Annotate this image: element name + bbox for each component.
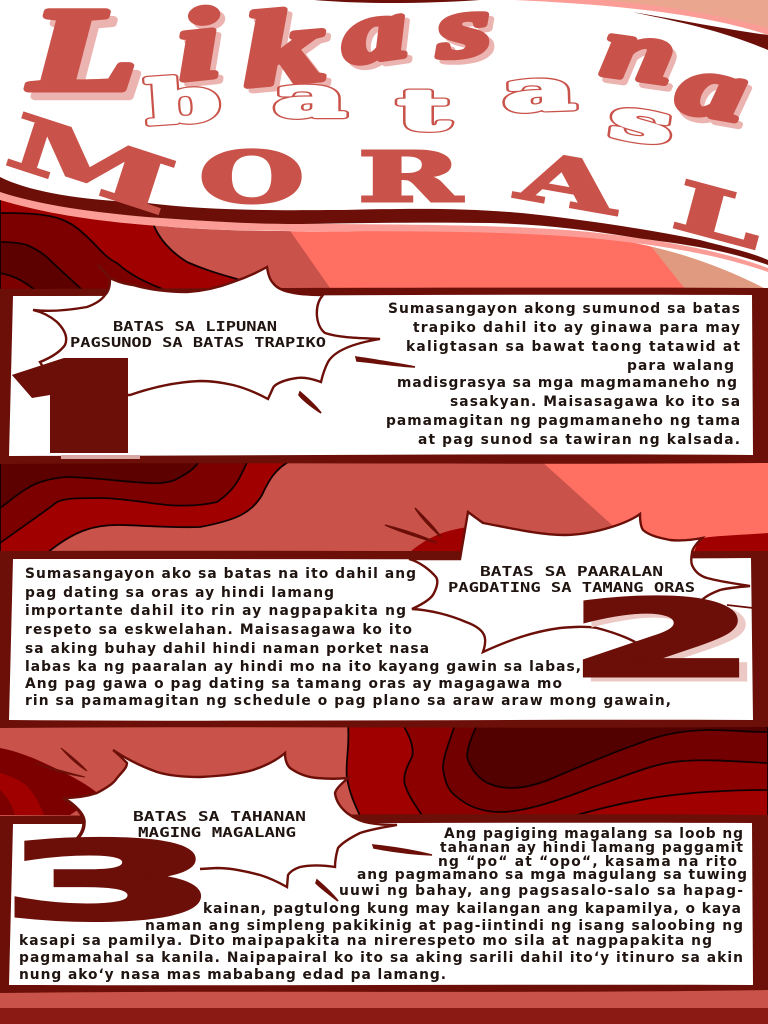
text block 1: sasakyan. Maisasagawa ko ito sa: [450, 394, 740, 410]
text block 3: kainan, pagtulong kung may kailangan ang kapamilya, o kaya: [203, 901, 741, 917]
speech burst 3: [35, 748, 432, 901]
title: MORAL: [0, 98, 768, 264]
text block 2: respeto sa eskwelahan. Maisasagawa ko ito: [25, 622, 412, 638]
panel 2: framed white box: [0, 551, 768, 728]
panel 1: framed white box: [0, 288, 768, 464]
text block 2: Sumasangayon ako sa batas na ito dahil ang: [25, 566, 416, 582]
title: batas: a: [502, 57, 576, 124]
number 2: 2: [568, 579, 756, 700]
text block 1: para walang: [627, 358, 734, 374]
background: section two colour layers: [0, 460, 768, 560]
text block 3: [19, 826, 747, 983]
title: MORAL: O: [199, 136, 304, 219]
speech burst 1: [33, 265, 415, 413]
number 3: 3: [1, 820, 219, 943]
text block 3: naman ang simpleng pakikinig at pag-iintindi ng isang saloobing ng: [145, 918, 743, 934]
title: Likas na: a: [672, 35, 753, 140]
text block 1: madisgrasya sa mga magmamaneho ng: [397, 375, 737, 391]
text block 3: nung ako‘y nasa mas mababang edad pa lamang.: [19, 967, 446, 983]
text block 3: pagmamahal sa kanila. Naipapairal ko ito sa aking sarili dahil ito‘y itinuro sa akin: [19, 950, 743, 966]
background: white title area: [0, 0, 768, 290]
background: top right corner waves: [314, 0, 768, 50]
title: batas: t: [398, 77, 449, 142]
heading 2: [448, 564, 695, 596]
text block 1: [386, 301, 740, 448]
text block 1: Sumasangayon akong sumunod sa batas: [388, 301, 740, 317]
text block 2: pag dating sa oras ay hindi lamang: [25, 585, 334, 601]
background: white title band lower edge: [0, 177, 768, 272]
background: section three colour layers: [0, 725, 768, 820]
text block 1: trapiko dahil ito ay ginawa para may: [413, 320, 740, 336]
background: bottom bands: [0, 985, 768, 1024]
title: Likas na: a: [676, 41, 757, 145]
heading 3: MAGING MAGALANG: [138, 825, 296, 841]
heading 1: PAGSUNOD SA BATAS TRAPIKO: [70, 335, 326, 351]
title: batas: b: [144, 64, 222, 139]
text block 2: rin sa pamamagitan ng schedule o pag plano sa araw araw mong gawain,: [25, 693, 671, 709]
text block 3: ang pagmamano sa mga magulang sa tuwing: [357, 867, 747, 883]
number 1: [12, 358, 140, 459]
heading 3: BATAS SA TAHANAN: [133, 809, 306, 825]
text block 1: at pag sunod sa tawiran ng kalsada.: [418, 432, 740, 448]
heading 1: BATAS SA LIPUNAN: [113, 319, 277, 335]
text block 2: importante dahil ito rin ay nagpapakita ng: [25, 603, 406, 619]
text block 1: pamamagitan ng pagmamaneho ng tama: [386, 413, 740, 429]
text block 3: kasapi sa pamilya. Dito maipapakita na nirerespeto mo sila at nagpapakita ng: [19, 933, 712, 949]
text block 2: [25, 566, 671, 709]
text block 2: labas ka ng paaralan ay hindi mo na ito kayang gawin sa labas,: [25, 659, 581, 675]
title: batas: t: [398, 77, 449, 142]
title: Likas na: n: [597, 0, 681, 103]
background: section one colour layers: [0, 190, 768, 300]
title: batas: s: [606, 85, 677, 158]
title: batas: [144, 57, 677, 158]
title: batas: a: [274, 64, 346, 129]
text block 3: ng “po“ at “opo“, kasama na rito: [438, 854, 737, 870]
text block 1: kaligtasan sa bawat taong tatawid at: [406, 339, 740, 355]
text block 3: uuwi ng bahay, ang pagsasalo-salo sa hapag-: [339, 883, 743, 899]
title: MORAL: R: [358, 137, 463, 217]
text block 2: Ang pag gawa o pag dating sa tamang oras ay magagawa mo: [25, 676, 562, 692]
title: batas: s: [606, 85, 677, 158]
speech burst 2: [385, 508, 753, 652]
title: batas: a: [502, 57, 576, 124]
heading 2: PAGDATING SA TAMANG ORAS: [448, 580, 695, 596]
title: batas: b: [144, 64, 222, 139]
text block 3: Ang pagiging magalang sa loob ng: [444, 826, 743, 842]
title: Likas na: n: [601, 5, 685, 108]
heading 3: [133, 809, 306, 841]
title: MORAL: M: [0, 98, 184, 232]
heading 2: BATAS SA PAARALAN: [480, 564, 663, 580]
text block 2: sa aking buhay dahil hindi naman porket nasa: [25, 641, 429, 657]
panel 3: framed white box: [0, 814, 768, 993]
number 2: 2: [576, 583, 764, 704]
title: batas: a: [274, 64, 346, 129]
title: MORAL: A: [511, 136, 627, 231]
title: Likas na: [28, 0, 757, 145]
heading 1: [70, 319, 326, 351]
text block 3: tahanan ay hindi lamang paggamit: [440, 840, 743, 856]
